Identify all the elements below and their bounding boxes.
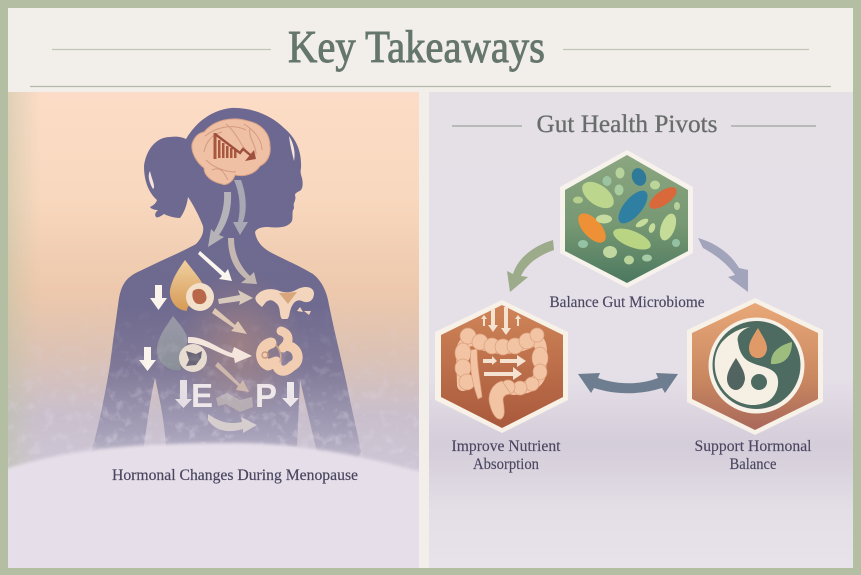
icon: uterus — [255, 287, 314, 319]
label: balance gut microbiome: Balance Gut Microbiome — [550, 294, 705, 311]
mist speckle — [8, 335, 360, 464]
hexagon: gut microbiome — [550, 150, 705, 311]
label: nutrient absorption second line: Absorption — [473, 456, 539, 473]
label: hormonal changes: Hormonal Changes During Menopause — [112, 467, 358, 484]
icon: brain with declining chart — [192, 119, 270, 185]
arrow: two-way hormone and nutrient — [578, 373, 678, 393]
icon: down arrows and hormone letters: P — [255, 377, 277, 414]
arrows: brain to organs — [188, 180, 257, 433]
panel: gut health pivots — [429, 92, 853, 568]
title: Key Takeaways — [288, 21, 545, 72]
label: hormonal balance: Support Hormonal — [694, 438, 812, 455]
icon: down arrows and hormone letters: E — [191, 377, 213, 414]
icon: estrogen droplet — [170, 260, 214, 311]
mist over lower body — [0, 443, 430, 575]
icon: intestine organ — [262, 331, 298, 371]
arrow: microbiome to nutrient — [507, 240, 554, 292]
label: hormonal balance second line: Balance — [730, 456, 776, 473]
hexagon: nutrient absorption — [435, 300, 568, 433]
panel: hormonal changes — [0, 92, 430, 575]
hexagon: hormonal balance — [687, 298, 823, 435]
icon: grey droplet — [157, 316, 207, 372]
subheading: Gut Health Pivots — [536, 111, 718, 138]
icon: down arrows and hormone letters — [139, 285, 299, 414]
arrow: microbiome to hormonal — [698, 238, 748, 292]
label: nutrient absorption: Improve Nutrient — [452, 438, 561, 455]
silhouette: woman — [90, 108, 361, 462]
